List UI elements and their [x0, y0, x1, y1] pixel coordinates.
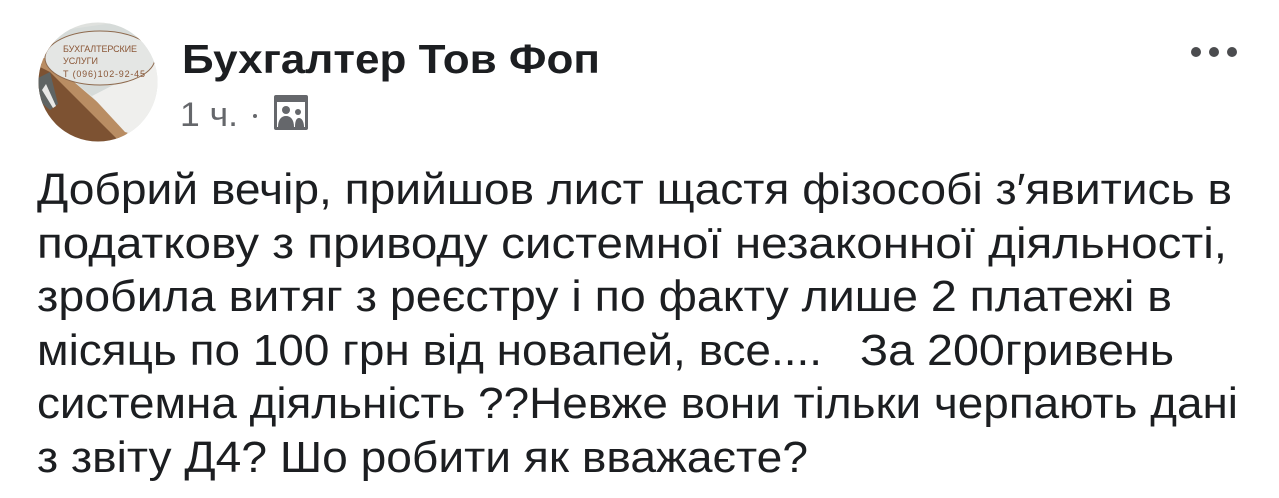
icon: audience group	[274, 95, 308, 130]
post time: 1 ч.	[180, 96, 238, 134]
separator dot	[253, 114, 257, 118]
post body text: з звіту Д4? Шо робити як вважаєте?	[37, 434, 808, 482]
post body text: За 200гривень	[860, 327, 1174, 375]
icon: profile avatar: БУХГАЛТЕРСКИЕ	[63, 44, 137, 54]
icon: profile avatar: УСЛУГИ	[63, 56, 98, 66]
post body text: зробила витяг з реєстру і по факту лише 2 платежі в	[37, 273, 1172, 321]
post body text: місяць по 100 грн від новапей, все....	[37, 327, 822, 375]
icon: more options dots	[1191, 47, 1237, 57]
icon: profile avatar	[38, 22, 158, 142]
post body text: Добрий вечір, прийшов лист щастя фізособі з′явитись в	[37, 166, 1232, 214]
icon: profile avatar: Т (096)102-92-45	[63, 69, 145, 79]
heading: page name: Бухгалтер Тов Фоп	[182, 36, 600, 82]
post body text	[37, 166, 1238, 482]
post body text: податкову з приводу системної незаконної діяльності,	[37, 220, 1227, 268]
post body text: системна діяльність ??Невже вони тільки черпають дані	[37, 380, 1238, 428]
